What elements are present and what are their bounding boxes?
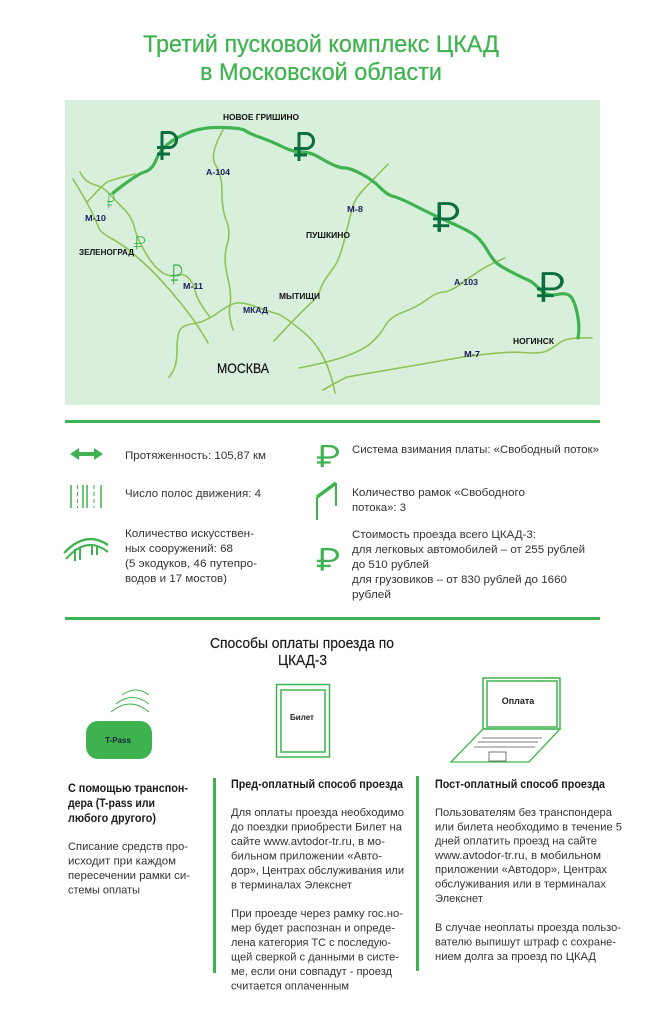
icon: T-Pass transponder [86, 690, 152, 759]
column: transponder [68, 783, 190, 896]
icon: ruble system [317, 446, 337, 467]
icon: lanes [71, 485, 101, 508]
text: cost: до 510 рублей [352, 559, 429, 571]
column: postpaid: приложении «Автодор», Центрах [435, 864, 607, 876]
column: postpaid: Пользователям без транспондера [435, 807, 613, 819]
column: transponder: дера (T-pass или [68, 798, 155, 810]
icon: laptop [451, 678, 560, 762]
icon: ruble small 1 [107, 194, 114, 208]
column: postpaid: вателю выпишут штраф с сохране- [435, 936, 616, 948]
icon: bridge [64, 539, 108, 561]
column: transponder: стемы оплаты [68, 884, 140, 896]
road: M-7 [323, 338, 592, 390]
map labels: М-10 [85, 213, 106, 223]
map labels: М-8 [347, 204, 363, 214]
road: M-8 [274, 164, 388, 341]
map labels: НОВОЕ ГРИШИНО [223, 112, 299, 122]
icon: ruble small 3 [171, 265, 182, 284]
icon: laptop: Оплата [502, 696, 535, 706]
text: length: Протяженность: 105,87 км [125, 450, 266, 462]
heading: payment methods: Способы оплаты проезда по [210, 635, 394, 652]
icon: double arrow [70, 448, 103, 460]
column: prepaid [231, 779, 404, 992]
text: structures [125, 528, 257, 585]
column: transponder: любого другого) [68, 813, 156, 825]
icon: ticket: Билет [290, 713, 314, 722]
icon: ruble map 1 [157, 132, 176, 160]
column: postpaid: Пост-оплатный способ проезда [435, 779, 606, 791]
text: frames [352, 487, 525, 514]
text: toll system: Система взимания платы: «Свободный поток» [352, 444, 599, 456]
icon: ruble cost [317, 549, 337, 571]
column: prepaid: Для оплаты проезда необходимо [231, 807, 404, 819]
text: cost [352, 529, 585, 601]
icon: ruble small 2 [134, 237, 145, 249]
text: structures: ных сооружений: 68 [125, 543, 233, 555]
text: lanes: Число полос движения: 4 [125, 488, 261, 500]
column: prepaid: При проезде через рамку гос.но- [231, 908, 403, 920]
column: postpaid: Элекснет [435, 893, 483, 905]
map labels: НОГИНСК [513, 336, 555, 346]
map labels: ЗЕЛЕНОГРАД [79, 247, 134, 257]
title [143, 31, 499, 86]
map labels: МЫТИЩИ [279, 291, 320, 301]
icon: ruble map 3 [433, 204, 457, 232]
road: M-10 link [87, 174, 135, 202]
text: structures: (5 экодуков, 46 путепро- [125, 558, 257, 570]
column: prepaid: дор», Центрах обслуживания или [231, 865, 404, 877]
column: prepaid: лена категория ТС с последую- [231, 937, 391, 949]
column: postpaid: или билета необходимо в течение 5 [435, 821, 622, 833]
text: frames: потока»: 3 [352, 502, 406, 514]
icon: T-Pass transponder: T-Pass [105, 736, 131, 745]
title: Третий пусковой комплекс ЦКАД [143, 31, 499, 58]
road: A-104 [213, 130, 233, 330]
column: postpaid: В случае неоплаты проезда пользо- [435, 922, 621, 934]
column: prepaid: бильном приложении «Авто- [231, 850, 382, 862]
column: prepaid: Пред-оплатный способ проезда [231, 779, 404, 791]
icon: ruble map 2 [294, 134, 314, 161]
road: M-11 [80, 172, 210, 317]
column: postpaid: обслуживания или в терминалах [435, 878, 606, 890]
map labels: А-103 [454, 277, 478, 287]
panel: facts [64, 444, 599, 601]
column: prepaid: ме, если они совпадут - проезд [231, 966, 393, 978]
map labels: ПУШКИНО [306, 230, 350, 240]
map labels: А-104 [206, 167, 230, 177]
text: cost: рублей [352, 589, 391, 601]
road: M-10 [73, 179, 208, 343]
icon: toll frame [317, 483, 336, 520]
column: prepaid: щей сверкой с данными в систе- [231, 952, 399, 964]
column: prepaid: сайте www.avtodor-tr.ru, в мо- [231, 836, 385, 848]
column: prepaid: до поездки приобрести Билет на [231, 822, 403, 834]
map labels: М-7 [464, 349, 480, 359]
title: в Московской области [200, 59, 442, 86]
column: postpaid: дней оплатить проезд на сайте [435, 836, 597, 848]
column: postpaid: нием долга за проезд по ЦКАД [435, 951, 597, 963]
column: postpaid [434, 779, 622, 963]
column: transponder: пересечении рамки си- [68, 870, 190, 882]
column: prepaid: считается оплаченным [231, 980, 349, 992]
road: MKAD [169, 303, 335, 393]
map labels: МКАД [243, 305, 268, 315]
heading: payment methods [210, 635, 394, 669]
column: prepaid: мер будет распознан и опреде- [231, 922, 395, 934]
text: structures: Количество искусствен- [125, 528, 254, 540]
road: A-103 [299, 258, 505, 368]
column: transponder: Списание средств про- [68, 841, 188, 853]
map labels: М-11 [183, 281, 203, 291]
column: transponder: исходит при каждом [68, 856, 176, 868]
column: transponder: С помощью транспон- [68, 783, 188, 795]
panel: map [65, 100, 600, 405]
road: TsKAD-3 main [113, 127, 579, 338]
text: cost: для легковых автомобилей – от 255 рублей [352, 544, 585, 556]
text: frames: Количество рамок «Свободного [352, 487, 525, 499]
heading: payment methods: ЦКАД-3 [278, 652, 327, 669]
icon: ruble map 4 [537, 274, 562, 302]
map labels [79, 112, 555, 376]
text: cost: Стоимость проезда всего ЦКАД-3: [352, 529, 536, 541]
map labels: МОСКВА [217, 360, 270, 376]
column: prepaid: в терминалах Элекснет [231, 880, 352, 892]
text: structures: водов и 17 мостов) [125, 573, 227, 585]
icon: ticket [276, 684, 330, 757]
column: postpaid: www.avtodor-tr.ru, в мобильном [434, 850, 601, 862]
text: cost: для грузовиков – от 830 рублей до 1660 [352, 574, 567, 586]
